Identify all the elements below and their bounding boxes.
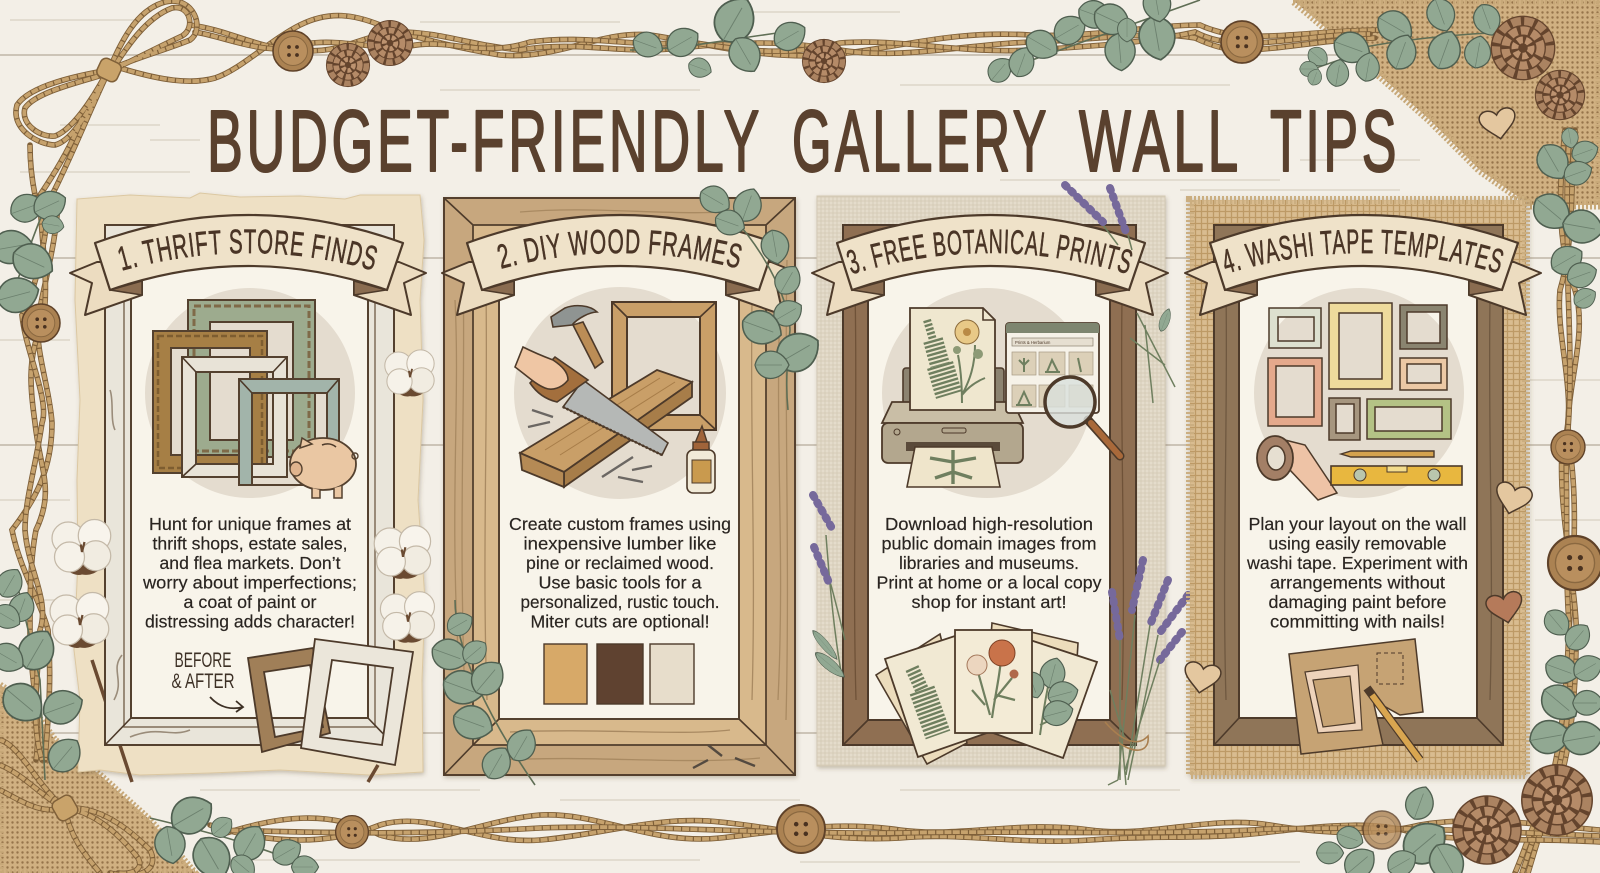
body text 1: worry about imperfections; [142,572,357,592]
main title: TIPS [1270,93,1400,190]
linen backing [817,196,1165,766]
icon: spirit level [1331,466,1462,485]
eucalyptus: top right [1300,0,1505,88]
inner wood frame [473,225,766,745]
ribbon heading 3: 3. FREE BOTANICAL PRINTS [846,229,1132,274]
body text 3: Download high-resolution [885,514,1093,534]
botanical print cards [876,623,1097,764]
dark wood frame [1214,225,1503,745]
eucalyptus: bottom left [150,788,319,873]
arrow [210,697,243,712]
panel 3: free botanical prints [811,195,1169,771]
before frame [248,648,330,752]
body text 4: using easily removable [1268,534,1446,554]
body text 2: personalized, rustic touch. [520,592,720,612]
left twine rope [12,195,58,760]
body text 4: damaging paint before [1268,592,1446,612]
before and after label: BEFORE [174,649,232,672]
icon: hand [515,347,568,389]
small wood frame [612,302,716,430]
twine knot bottom left [0,740,153,873]
body text 2: Create custom frames using [509,514,731,534]
distressed white frame [105,225,394,745]
body text 2: Use basic tools for a [538,572,702,592]
burlap backing [1190,200,1526,775]
body text 4: washi tape. Experiment with [1246,553,1468,573]
ornate gold frame [153,331,267,473]
browser window: Prints & Herbarium [1015,340,1051,345]
body text 3 [876,514,1102,612]
cotton stems [92,640,382,782]
torn paper backing [74,193,425,775]
teal frame [239,379,339,485]
body text 2: Miter cuts are optional! [530,612,710,632]
ribbon heading 2: 2. DIY WOOD FRAMES [497,229,742,269]
icon: pencil [1341,451,1434,457]
panel 2: DIY wood frames [441,196,800,780]
ribbon heading 1: 1. THRIFT STORE FINDS [118,229,378,271]
body text 4: Plan your layout on the wall [1248,514,1466,534]
printed botanical sheet [910,308,995,410]
icon: printer [882,368,1023,487]
body text 3: shop for instant art! [912,592,1066,612]
panel 4: washi tape templates [1184,196,1542,782]
icon: saw [530,357,668,455]
twine bow top left [16,1,197,195]
body text 1 [142,514,357,632]
ribbon heading 4: 4. WASHI TAPE TEMPLATES [1224,229,1504,272]
pine cones [326,16,1593,865]
before and after label: & AFTER [172,670,234,693]
icon: washi tape roll [1257,436,1337,500]
eucalyptus: left lower [0,564,88,780]
icon: magnifying glass [1045,377,1120,456]
distressed white small frame [182,357,287,477]
lavender sprigs [810,185,1188,785]
ribbon heading 4 [1184,214,1542,316]
after frame [301,639,413,765]
eucalyptus: top right of centre [983,0,1200,87]
body text 1: thrift shops, estate sales, [152,534,348,554]
panel 1: thrift store finds [69,192,428,783]
picture circle [1254,288,1464,498]
eucalyptus: left upper [0,185,71,317]
outer wood frame [444,198,795,775]
eucalyptus: bottom right [1316,782,1472,873]
body text 2 [509,514,731,632]
icon: nails [528,410,652,482]
body text 3: Print at home or a local copy [876,572,1102,592]
body text 1: Hunt for unique frames at [149,514,351,534]
ornate sage frame [188,300,315,457]
body text 3: public domain images from [882,534,1096,554]
eucalyptus: panel 2 top right [695,181,827,410]
eucalyptus: top centre [629,0,811,81]
kraft paper template [1289,639,1423,760]
ribbon heading 1 [69,214,427,316]
icon: glue bottle [687,426,715,493]
body text 2: inexpensive lumber like [524,534,716,554]
eucalyptus: right upper [1526,127,1600,312]
ribbon heading 2 [441,214,786,316]
burlap corner bottom left [0,685,195,873]
picture circle [514,287,726,499]
brown wood frame [843,225,1136,745]
top twine rope [120,16,1380,81]
main title: GALLERY [792,93,1050,190]
wood swatches [544,644,694,704]
before and after label [172,649,234,693]
cotton bolls [50,350,434,648]
body text 3: libraries and museums. [899,553,1079,573]
body text 4: committing with nails! [1270,612,1445,632]
body text 1: a coat of paint or [184,592,317,612]
wooden hearts [1181,107,1534,696]
burlap corner top right [1293,0,1600,205]
picture circle [145,288,355,498]
main title: WALL [1079,93,1242,190]
icon: hammer [551,306,603,368]
body text 4: arrangements without [1270,572,1445,592]
loose nails on frame [693,745,755,768]
browser window [1006,323,1099,413]
body text 4 [1246,514,1468,632]
eucalyptus: right lower [1527,604,1600,757]
bottom twine rope [210,815,1600,842]
picture circle [882,288,1092,498]
body text 2: pine or reclaimed wood. [526,553,714,573]
washi tape wall frames [1268,303,1451,440]
right twine rope [1515,130,1579,873]
eucalyptus: panel 2 bottom left [427,600,542,785]
icon: piggy bank [290,438,358,498]
body text 1: distressing adds character! [145,612,355,632]
lumber plank [520,370,692,487]
body text 1: and flea markets. Don’t [160,553,341,573]
ribbon heading 3 [811,214,1169,316]
main title: BUDGET-FRIENDLY [207,93,763,190]
